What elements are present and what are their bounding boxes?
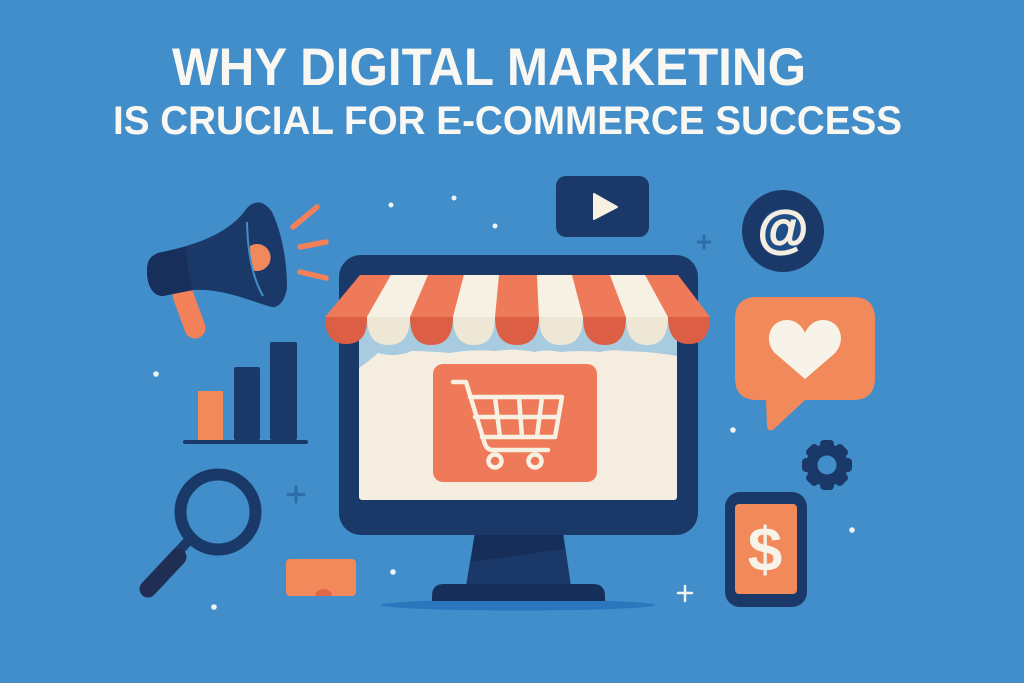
monitor screen	[359, 275, 677, 500]
monitor	[325, 255, 710, 610]
title	[113, 38, 902, 143]
icon: speech bubble with heart	[735, 297, 875, 430]
monitor stand	[432, 532, 605, 601]
icon: decorative dots and plus signs	[153, 196, 855, 610]
awning	[325, 275, 710, 345]
title: IS CRUCIAL FOR E-COMMERCE SUCCESS	[113, 99, 902, 143]
icon: at sign: @	[758, 201, 808, 259]
icon: phone with dollar: $	[748, 516, 782, 585]
icon: at sign	[742, 190, 824, 272]
icon: video play	[556, 176, 649, 237]
icon: phone with dollar	[725, 492, 807, 607]
icon: magnifying glass	[148, 474, 256, 589]
cart panel	[433, 364, 597, 482]
awning shadow	[359, 317, 677, 368]
title: WHY DIGITAL MARKETING	[172, 38, 806, 97]
icon: orange envelope card	[286, 559, 356, 596]
icon: megaphone	[147, 202, 326, 328]
monitor shadow	[381, 600, 655, 610]
icon: shopping cart	[453, 382, 562, 468]
monitor frame	[339, 255, 698, 535]
icon: gear	[802, 440, 852, 490]
bar chart	[183, 342, 308, 444]
